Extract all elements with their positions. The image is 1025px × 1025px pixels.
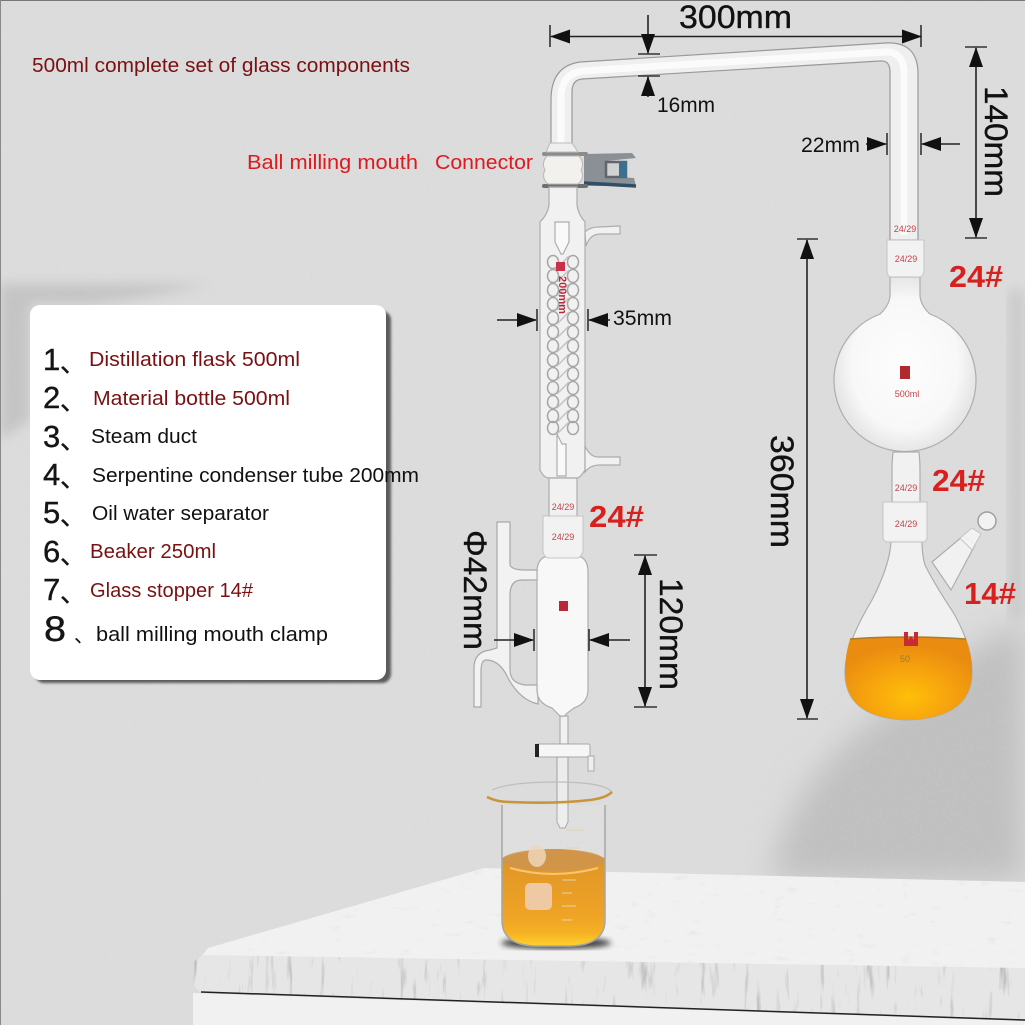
list item 6: Beaker 250ml [90,541,216,563]
joint mark: 24/29 [895,254,917,264]
material bottle: round flask [834,240,976,451]
distillation flask [845,502,996,720]
size phi 42mm [457,530,630,651]
list item 7: Glass stopper 14# [90,580,254,602]
stopcock [535,716,594,828]
logo [904,632,918,646]
label patch [525,883,552,910]
joint size 24# condenser: 24# [589,499,644,534]
list item 1: 、 [60,348,86,378]
joint mark: 24/29 [895,483,917,493]
list item 6 [43,534,216,570]
size 140mm: 140mm [978,86,1014,197]
list item 1: 1 [43,342,60,377]
size 22mm: 22mm [801,134,860,157]
joint mark: 24/29 [552,532,574,542]
logo [900,366,910,379]
size 35mm [497,307,672,331]
size phi 42mm: Φ42mm [457,530,493,650]
list panel [30,305,419,683]
list item 2: Material bottle 500ml [93,388,290,410]
steam duct tube [551,43,918,240]
size 16mm [638,15,715,117]
joint mark upper: 24/29 [894,224,916,234]
size 300mm [550,0,921,47]
list item 1 [43,342,300,378]
list item 5 [43,495,269,531]
size 360mm [764,239,818,719]
clamp [542,143,636,188]
list item 8: 、 [74,625,94,647]
list item 2: 、 [60,386,86,416]
size 120mm: 120mm [653,578,689,690]
list item 8 [44,610,328,649]
list item 6: 6 [43,534,60,569]
oil in flask [845,637,972,720]
list item 3: 3 [43,419,60,454]
list item 2: 2 [43,380,60,415]
condenser tube [540,187,620,518]
size 120mm [634,555,689,707]
serpentine coil [548,256,578,434]
size 16mm: 16mm [657,94,715,117]
list item 4: 、 [60,463,86,493]
logo mark [556,262,565,271]
list item 8: 8 [44,610,66,649]
list item 6: 、 [60,540,86,570]
side neck and stopper [932,512,996,590]
list item 2 [43,380,290,416]
logo mark [559,601,568,611]
joint mark: 24/29 [552,502,574,512]
list item 7: 7 [43,572,60,607]
size 300mm: 300mm [679,0,792,35]
size 22mm [801,133,960,157]
size 360mm: 360mm [764,435,800,548]
neck between flasks [892,452,920,503]
oil in beaker [502,849,605,946]
list item 7: 、 [60,578,86,608]
joint mark: 24/29 [895,519,917,529]
list item 1: Distillation flask 500ml [89,349,300,371]
joint size 14#: 14# [964,576,1016,611]
marble table [193,868,1025,1025]
list item 4: 4 [43,457,60,492]
volume mark: 50 [900,654,910,664]
size 140mm [965,47,1014,238]
list item 5: 、 [60,501,86,531]
label: connector: Connector [435,152,533,174]
beaker scale [562,830,584,920]
list item 3: 、 [60,425,86,455]
oil water separator [474,516,588,717]
title: 500ml complete set of glass components [32,55,410,77]
list item 4: Serpentine condenser tube 200mm [92,465,419,487]
list item 3 [43,419,197,455]
size 35mm: 35mm [613,307,672,330]
list item 7 [43,572,254,608]
volume mark: 500ml [895,389,919,399]
list item 5: 5 [43,495,60,530]
beaker [487,782,612,949]
list item 5: Oil water separator [92,503,269,525]
side arm and return loop [474,522,538,707]
list item 3: Steam duct [91,426,197,448]
list item 4 [43,457,419,493]
list item 8: ball milling mouth clamp [96,624,328,646]
condenser marking: 200mm [556,276,568,314]
label: ball milling mouth: Ball milling mouth [247,152,418,174]
joint size 24# top right: 24# [949,259,1003,294]
joint size 24# middle right: 24# [932,463,985,498]
